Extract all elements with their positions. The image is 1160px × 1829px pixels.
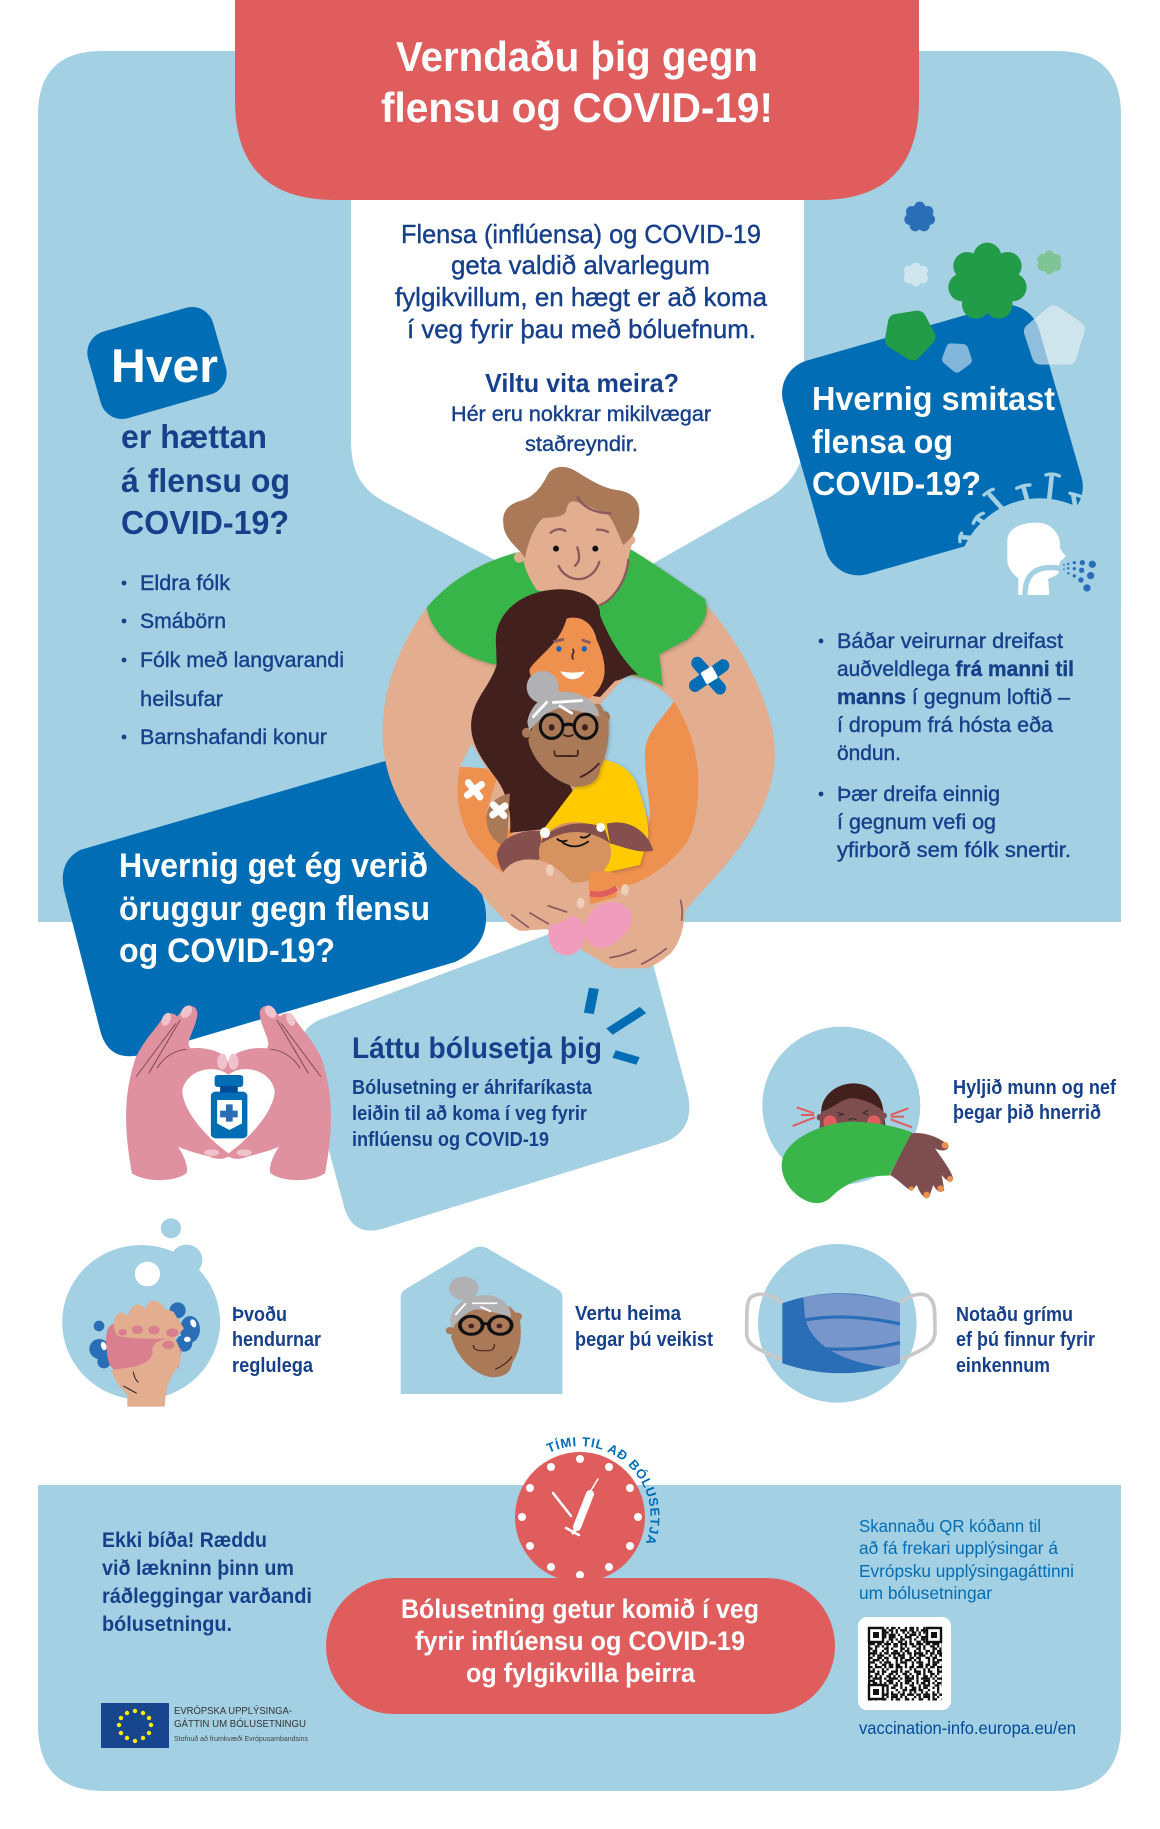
portal URL: vaccination-info.europa.eu/en <box>859 1718 1076 1738</box>
icon: surgical mask <box>747 1244 935 1403</box>
logo: EU flag and portal name: GÁTTIN UM BÓLUSETNINGU <box>174 1717 306 1730</box>
heading text: Hvernig smitast <box>812 380 1055 417</box>
illustration: clock with syringe hand <box>515 1452 645 1582</box>
wash hands text: Þvoðu <box>232 1304 287 1326</box>
QR instructions: um bólusetningar <box>859 1583 992 1603</box>
illustration: family hugging <box>383 467 775 968</box>
tip: wear a mask <box>747 1244 1095 1403</box>
woman's hair and face <box>471 589 638 833</box>
intro text block: Viltu vita meira? <box>485 368 679 398</box>
spread bullet list: auðveldlega frá manni til <box>837 658 1074 681</box>
panel: how can I stay safe <box>63 745 486 1056</box>
yellow shirt <box>523 760 648 874</box>
grandmother's arm with plasters <box>467 783 510 847</box>
heading tag: Hver <box>82 302 232 424</box>
icon: house with grandmother <box>401 1247 562 1394</box>
heading tag: Hver: Hver <box>111 339 218 392</box>
spread bullet list: Þær dreifa einnig <box>837 783 1000 806</box>
QR instructions <box>859 1516 1074 1603</box>
icon: coronavirus with sneezing head <box>958 472 1096 595</box>
spread bullet list: Báðar veirurnar dreifast <box>837 630 1063 653</box>
tip: stay at home <box>401 1247 713 1394</box>
QR code <box>858 1617 951 1710</box>
heading: at risk: er hættan <box>121 418 267 455</box>
heading: how can I stay safe <box>119 847 430 970</box>
heading: at risk: á flensu og <box>121 462 290 499</box>
logo: EU flag and portal name <box>101 1703 308 1748</box>
call to action: talk to your doctor: Ekki bíða! Ræddu <box>102 1529 267 1552</box>
get vaccinated text: inflúensu og COVID-19 <box>352 1129 549 1151</box>
risk group list: Eldra fólk <box>140 571 230 595</box>
wash hands text <box>232 1304 321 1377</box>
panel: bottom background <box>38 1485 1121 1791</box>
QR instructions: að fá frekari upplýsingar á <box>859 1538 1058 1558</box>
heading: at risk: COVID-19? <box>121 504 289 541</box>
woman's arms <box>458 701 698 890</box>
logo: EU flag and portal name: EVRÓPSKA UPPLÝSINGA- <box>174 1704 292 1717</box>
mask text: ef þú finnur fyrir <box>956 1329 1095 1351</box>
risk group list: Barnshafandi konur <box>140 725 327 749</box>
sneezing tip text: þegar þið hnerrið <box>953 1102 1101 1124</box>
risk group list: Smábörn <box>140 609 226 633</box>
risk group list: heilsufar <box>140 687 223 711</box>
mask text: einkennum <box>956 1355 1050 1377</box>
tip: cover mouth when sneezing <box>762 1027 1116 1203</box>
intro text block <box>395 219 768 456</box>
heading: how can I stay safe: öruggur gegn flensu <box>119 890 430 928</box>
intro text block: staðreyndir. <box>525 433 638 456</box>
get vaccinated text: leiðin til að koma í veg fyrir <box>352 1103 587 1125</box>
panel: intro white speech shape <box>351 190 804 605</box>
intro text block: Flensa (inflúensa) og COVID-19 <box>401 219 761 249</box>
get vaccinated text: Bólusetning er áhrifaríkasta <box>352 1077 593 1099</box>
mask text: Notaðu grímu <box>956 1304 1073 1326</box>
tip: wash hands <box>62 1218 321 1407</box>
red pill message: fyrir inflúensu og COVID-19 <box>415 1626 745 1656</box>
sneezing tip text: Hyljið munn og nef <box>953 1077 1116 1099</box>
child <box>497 822 653 958</box>
spread bullet list: í gegnum vefi og <box>837 811 996 834</box>
intro text block: geta valdið alvarlegum <box>451 250 710 280</box>
panel: who is at risk <box>82 302 344 749</box>
icon: attention rays <box>589 988 643 1061</box>
mask text <box>956 1304 1095 1377</box>
red pill message: Bólusetning getur komið í veg <box>401 1594 759 1624</box>
icon: person sneezing into elbow <box>762 1027 953 1203</box>
icon: hands washing with soap <box>89 1301 200 1407</box>
heading box <box>774 297 1091 583</box>
panel: how flu and covid spread <box>782 202 1096 862</box>
heading text <box>812 380 1055 502</box>
heading: at risk <box>121 418 290 541</box>
title banner <box>235 0 919 200</box>
spread bullet list: öndun. <box>837 742 901 765</box>
heading text: COVID-19? <box>812 465 981 502</box>
spread bullet list: manns í gegnum loftið – <box>837 686 1070 709</box>
QR instructions: Skannaðu QR kóðann til <box>859 1516 1041 1536</box>
call to action: talk to your doctor <box>102 1529 312 1636</box>
risk group list <box>122 571 344 749</box>
icon: soap bubbles background <box>62 1218 220 1400</box>
stay at home text: Vertu heima <box>575 1303 682 1325</box>
man's arms <box>383 605 775 968</box>
intro text block: fylgikvillum, en hægt er að koma <box>395 282 768 312</box>
call to action: talk to your doctor: við lækninn þinn um <box>102 1557 294 1580</box>
title banner: flensu og COVID-19! <box>381 84 773 131</box>
wash hands text: hendurnar <box>232 1329 321 1351</box>
spread bullet list <box>819 630 1074 862</box>
sneezing tip text <box>953 1077 1116 1124</box>
panel: get vaccinated box <box>301 913 689 1231</box>
spread bullet list: í dropum frá hósta eða <box>837 714 1053 737</box>
spread bullet list: yfirborð sem fólk snertir. <box>837 839 1071 862</box>
call to action: talk to your doctor: bólusetningu. <box>102 1613 232 1636</box>
logo: EU flag and portal name: Stofnuð að frumkvæði Evrópusambandsins <box>174 1735 308 1743</box>
green shirt <box>427 549 707 686</box>
red pill message <box>326 1578 835 1714</box>
wash hands text: reglulega <box>232 1355 314 1377</box>
man's head <box>503 467 639 605</box>
get vaccinated text <box>352 1032 602 1151</box>
heading: how can I stay safe: og COVID-19? <box>119 932 335 970</box>
call to action: talk to your doctor: ráðleggingar varðandi <box>102 1585 312 1608</box>
risk group list: Fólk með langvarandi <box>140 648 344 672</box>
intro text block: í veg fyrir þau með bóluefnum. <box>407 314 756 344</box>
panel: top background <box>38 51 1121 922</box>
grandmother's head <box>522 671 610 787</box>
curved clock caption: TÍMI TIL AÐ BÓLUSETJA <box>546 1437 660 1543</box>
heading: how can I stay safe: Hvernig get ég verið <box>119 847 428 885</box>
QR instructions: Evrópsku upplýsingagáttinni <box>859 1561 1074 1581</box>
man's hands <box>502 858 687 968</box>
heading text: flensa og <box>812 423 953 460</box>
icon: virus particles <box>885 202 1085 373</box>
intro text block: Hér eru nokkrar mikilvægar <box>451 403 711 426</box>
title banner: Verndaðu þig gegn <box>396 33 758 80</box>
icon: blue plaster <box>695 663 723 688</box>
stay at home text <box>575 1303 713 1351</box>
stay at home text: þegar þú veikist <box>575 1329 713 1351</box>
get vaccinated text: Láttu bólusetja þig <box>352 1032 602 1065</box>
red pill message: og fylgikvilla þeirra <box>466 1658 696 1688</box>
illustration: hands forming heart around vaccine vial <box>126 1004 331 1180</box>
